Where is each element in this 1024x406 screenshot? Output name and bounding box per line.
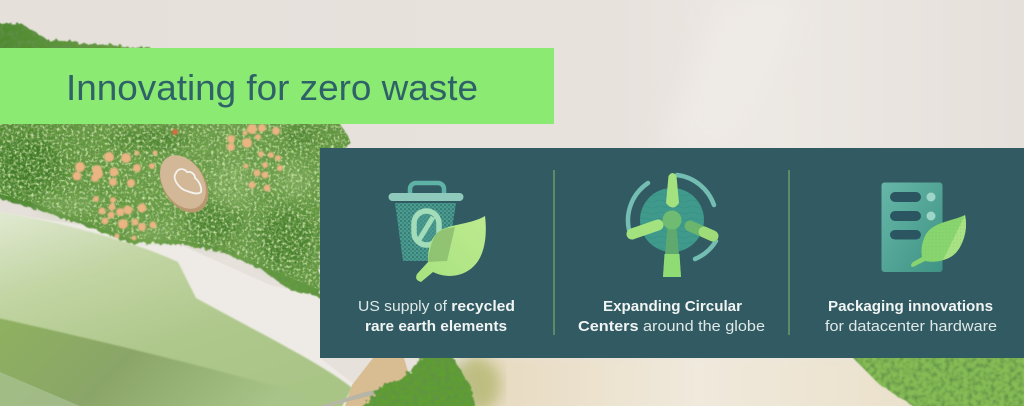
title banner	[0, 48, 554, 124]
text: packaging innovations: Packaging innovations	[828, 298, 993, 315]
curved green glass sheet	[0, 208, 355, 406]
title: Innovating for zero waste	[66, 67, 478, 108]
panel: initiatives	[320, 148, 1024, 358]
mossy grass band with flowers	[0, 24, 350, 297]
text: recycled rare earth	[358, 298, 515, 335]
icon: wind turbine globe	[628, 173, 716, 277]
text: recycled rare earth: rare earth elements	[365, 318, 507, 335]
text: recycled rare earth: US supply of recycled	[358, 298, 515, 315]
icon: server with leaf	[882, 182, 966, 272]
tan wedge and foreground grass	[320, 350, 501, 406]
text: circular centers	[578, 298, 765, 335]
text: packaging innovations	[825, 298, 997, 335]
text: circular centers: Centers around the globe	[578, 318, 765, 335]
foreground grass right	[845, 350, 1024, 406]
sandy path	[470, 358, 925, 406]
text: packaging innovations: for datacenter hardware	[825, 318, 997, 335]
cork disc with cloud	[150, 147, 218, 221]
icon: trash can with leaf	[388, 183, 486, 282]
text: circular centers: Expanding Circular	[603, 298, 742, 315]
